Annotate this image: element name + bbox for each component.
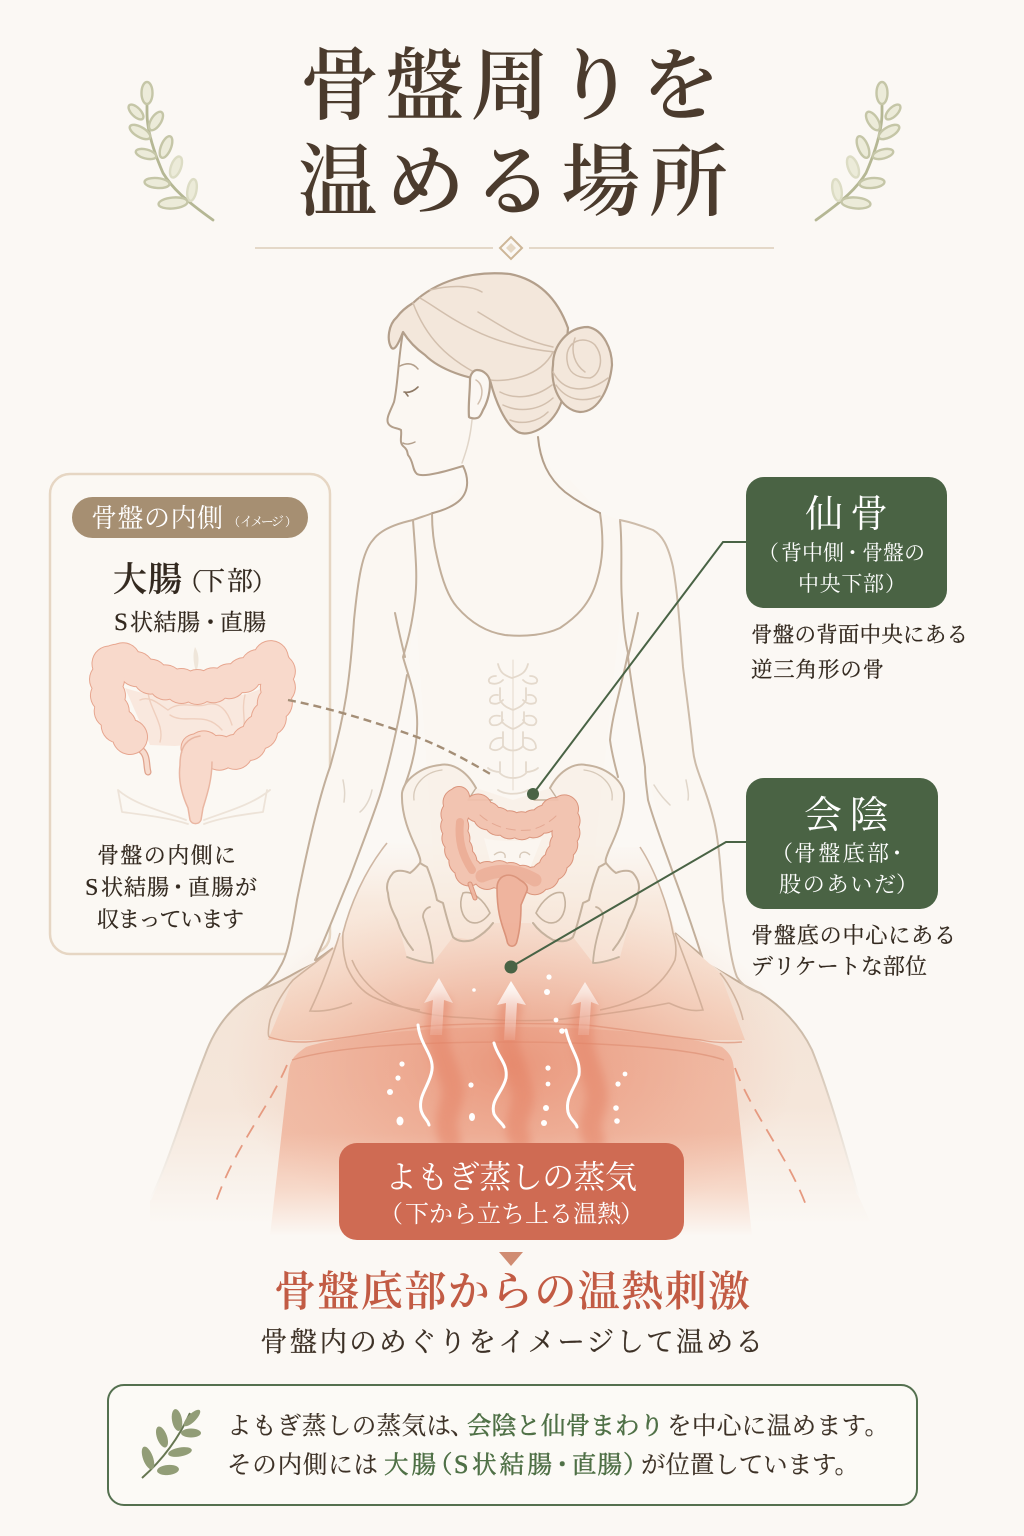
icon: right laurel sprig: [816, 82, 903, 220]
steam waves: [437, 1005, 597, 1140]
pill label: ）: [285, 515, 297, 529]
stool: [269, 1024, 752, 1236]
panel description: 直腸が: [188, 875, 257, 900]
panel heading: 下部: [199, 567, 253, 596]
dashed warm outlines: [214, 1065, 807, 1208]
panel heading: S: [114, 609, 128, 636]
steam label: [339, 1143, 684, 1240]
figure: lower cape: [150, 933, 875, 1232]
white steam lines: [418, 1025, 579, 1127]
panel description: S: [85, 875, 98, 901]
pill label: 骨盤の内側: [91, 504, 223, 533]
spine: [488, 660, 538, 794]
leader lines and markers: [504, 542, 746, 974]
callout: sacrum: 背中側: [781, 541, 844, 565]
subheading: 骨盤内のめぐりをイメージして温める: [260, 1326, 763, 1357]
summary text: 大腸: [384, 1451, 436, 1479]
figure: hair and bun: [389, 273, 612, 433]
summary text: が位置しています。: [641, 1451, 859, 1479]
summary box: [108, 1385, 917, 1505]
panel description: 状結腸: [101, 875, 169, 900]
icon: herb sprig: [139, 1407, 203, 1478]
steam droplets: [387, 974, 627, 1126]
title: 温める場所: [298, 140, 728, 227]
summary text: その内側には: [227, 1451, 378, 1479]
text: perineum description: [751, 923, 956, 979]
text: sacrum description: [751, 623, 968, 682]
text: sacrum description: 骨盤の背面中央にある: [751, 623, 968, 647]
callout: perineum: 陰: [850, 795, 888, 837]
pill label: （: [228, 515, 240, 529]
text: perineum description: 骨盤底の中心にある: [751, 923, 956, 948]
figure: neck and face: [387, 332, 600, 513]
callout: sacrum: （: [758, 541, 779, 565]
steam label: ）: [620, 1202, 644, 1228]
figure: skirt and pelvic garment: [268, 843, 745, 1040]
panel description: ・: [167, 875, 189, 900]
panel heading: ・: [199, 610, 222, 635]
summary text: ）: [623, 1452, 648, 1479]
title: 骨盤周りを: [300, 44, 720, 131]
large intestine illustration: [107, 647, 278, 824]
panel description: 収まっています: [97, 907, 244, 932]
pelvic colon (S状結腸・直腸): [455, 797, 566, 946]
text: sacrum description: 逆三角形の骨: [751, 658, 884, 682]
figure: torso and arms: [260, 480, 760, 993]
summary text: 状結腸: [472, 1451, 552, 1479]
callout: sacrum: [746, 477, 947, 608]
summary text: S: [454, 1450, 468, 1479]
panel description: 骨盤の内側に: [97, 843, 236, 868]
callout: perineum: ・: [886, 841, 908, 866]
callout: perineum: [746, 778, 938, 909]
summary text: 直腸: [572, 1451, 622, 1479]
heat glow: [227, 890, 797, 1240]
callout: perineum: 骨盤底部: [794, 841, 889, 866]
pill label: [72, 497, 308, 538]
callout: sacrum: 仙: [805, 494, 843, 536]
summary text: 会陰と仙骨まわり: [467, 1412, 664, 1440]
text: perineum description: デリケートな部位: [751, 954, 927, 979]
summary text: ・: [550, 1452, 574, 1479]
pill label: イメージ: [240, 514, 284, 529]
pelvis bones: [387, 765, 639, 963]
panel heading: 直腸: [220, 610, 266, 635]
summary text: 、: [450, 1413, 474, 1440]
summary text: よもぎ蒸しの蒸気は: [227, 1412, 451, 1440]
panel heading: ）: [252, 570, 276, 596]
panel heading: （: [178, 570, 202, 596]
steam label: 下から立ち上る温熱: [405, 1201, 622, 1228]
summary text: を中心に温めます。: [667, 1412, 889, 1440]
steam label: （: [379, 1202, 403, 1228]
steam label: よもぎ蒸しの蒸気: [385, 1159, 637, 1195]
summary text: （: [428, 1452, 452, 1479]
panel frame: [50, 474, 330, 954]
inset dashed leader: [288, 700, 492, 775]
icon: left laurel sprig: [126, 82, 213, 220]
title divider: [255, 237, 774, 259]
callout: sacrum: ・: [842, 541, 863, 565]
callout: perineum: 会: [804, 795, 842, 837]
arrow down: [499, 1252, 523, 1266]
callout: perineum: ）: [896, 872, 918, 897]
callout: perineum: （: [771, 841, 793, 866]
callout: perineum: 股のあいだ: [779, 872, 896, 897]
title: [298, 44, 728, 227]
summary text: [227, 1412, 889, 1479]
panel heading: 状結腸: [130, 610, 200, 635]
panel: inside of pelvis contents: [72, 497, 308, 932]
callout: sacrum: ）: [885, 572, 906, 596]
panel heading: [113, 561, 276, 636]
heading: heat stimulation: 骨盤底部からの温熱刺激: [274, 1269, 750, 1316]
callout: sacrum: 骨盤の: [862, 541, 925, 565]
panel heading: 大腸: [113, 561, 182, 599]
callout: sacrum: 骨: [850, 494, 888, 536]
steam arrows: [424, 978, 599, 1040]
panel description: [85, 843, 257, 932]
callout: sacrum: 中央下部: [798, 572, 884, 596]
